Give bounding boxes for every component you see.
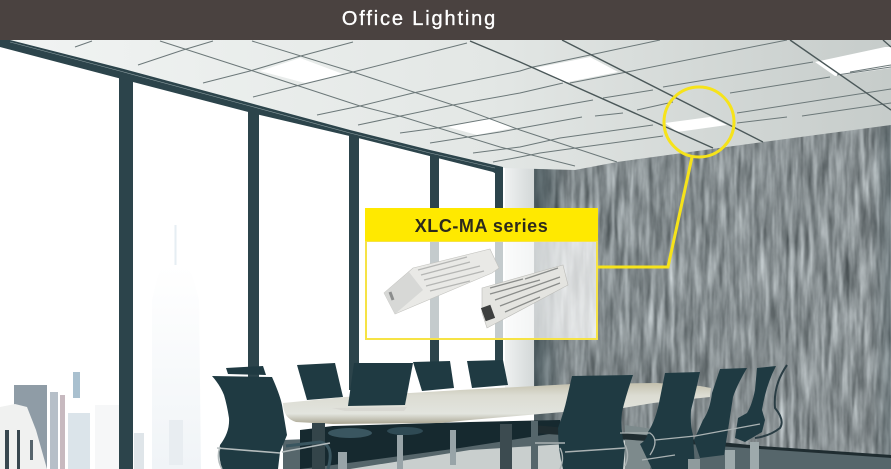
wall column — [505, 160, 534, 400]
series name: XLC-MA series — [415, 216, 548, 236]
window top frame — [0, 40, 503, 178]
floor — [283, 420, 891, 469]
chairs behind the table — [226, 360, 508, 400]
product panel — [366, 241, 597, 339]
chairs in front of the table — [212, 365, 787, 469]
header bar — [0, 0, 891, 40]
title: Office Lighting — [342, 8, 497, 30]
conference table — [283, 383, 711, 469]
yellow header bar — [365, 208, 598, 241]
window glass background — [0, 40, 510, 469]
callout: XLC-MA series — [365, 208, 598, 339]
product: driver one — [384, 249, 499, 314]
callout connector line and highlight circle — [597, 87, 734, 267]
window mullions — [119, 70, 503, 469]
ceiling light panels — [260, 47, 891, 135]
laptop — [332, 363, 413, 411]
city skyline outside the window — [0, 225, 201, 469]
ceiling — [0, 40, 891, 170]
concrete wall — [534, 120, 891, 469]
product: driver two — [481, 265, 568, 328]
ceiling grid lines — [75, 40, 891, 166]
